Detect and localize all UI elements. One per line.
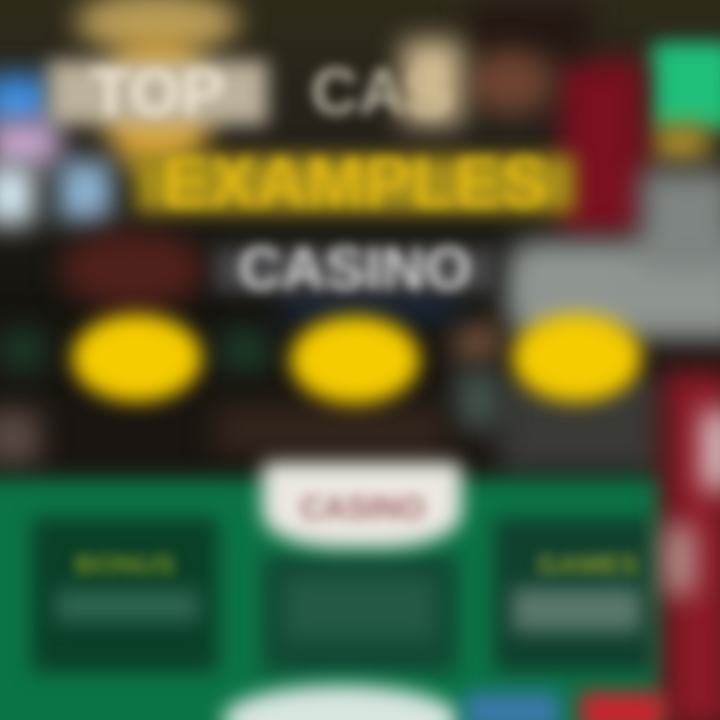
panel: green table: [0, 352, 720, 720]
white card banner text: CASINO: [300, 490, 425, 526]
dealer dark red clothing: [560, 60, 645, 235]
white card banner: [262, 462, 462, 548]
side pale chip: [665, 525, 695, 595]
left blue neon sign: [0, 75, 50, 125]
right card heading: GAMES: [537, 549, 639, 580]
left card heading: BONUS: [74, 549, 176, 580]
title line two text: EXAMPLES: [162, 143, 548, 221]
title line two: [135, 155, 575, 213]
dealer dark hair: [470, 5, 590, 55]
title line three: [215, 248, 495, 292]
icon: yellow badge right: [512, 314, 642, 402]
title plate: white word: [48, 60, 268, 125]
lower dark gray box: [498, 375, 663, 475]
title text: second word: CAS: [311, 54, 450, 128]
panel: header background: [0, 0, 720, 477]
left blue panel: [58, 160, 112, 222]
right card text: [512, 588, 642, 632]
centre dark green chip: [220, 330, 270, 370]
bottom blue strip: [465, 692, 560, 720]
panel: right dark card: [494, 518, 654, 672]
icon: chandelier: [75, 0, 240, 55]
dealer sleeve: [640, 170, 720, 270]
icon: yellow badge left: [72, 314, 202, 402]
lower centre brown: [215, 405, 445, 455]
panel: centre dark card: [262, 555, 458, 673]
left card text: [55, 590, 200, 622]
bottom white oval: [222, 685, 460, 720]
green table surface: [0, 478, 665, 720]
navy shadow below title: [280, 295, 460, 320]
left figure head: [60, 230, 205, 310]
title line three text: CASINO: [238, 235, 472, 302]
lower left muted red: [0, 410, 40, 465]
chandelier glow: [105, 40, 210, 170]
centre card text: [285, 578, 435, 638]
title text: first word: TOP: [90, 55, 225, 129]
left pink neon sign: [0, 120, 60, 165]
red side column: [664, 370, 720, 720]
dealer hand: [450, 322, 505, 364]
yellow below green icon: [650, 125, 710, 160]
cream lamp: [402, 40, 462, 125]
left light panel: [0, 165, 35, 225]
white side highlights: [702, 410, 720, 490]
dealer shirt: [505, 240, 720, 340]
icon: yellow badge centre: [290, 316, 420, 404]
left dark green chip: [0, 330, 45, 370]
right green icon: [650, 42, 720, 130]
title line one: [34, 18, 482, 146]
bottom red strip: [580, 692, 665, 720]
panel: left dark card: [32, 518, 218, 672]
lower teal mid box: [455, 370, 500, 430]
dealer face: [468, 50, 553, 115]
